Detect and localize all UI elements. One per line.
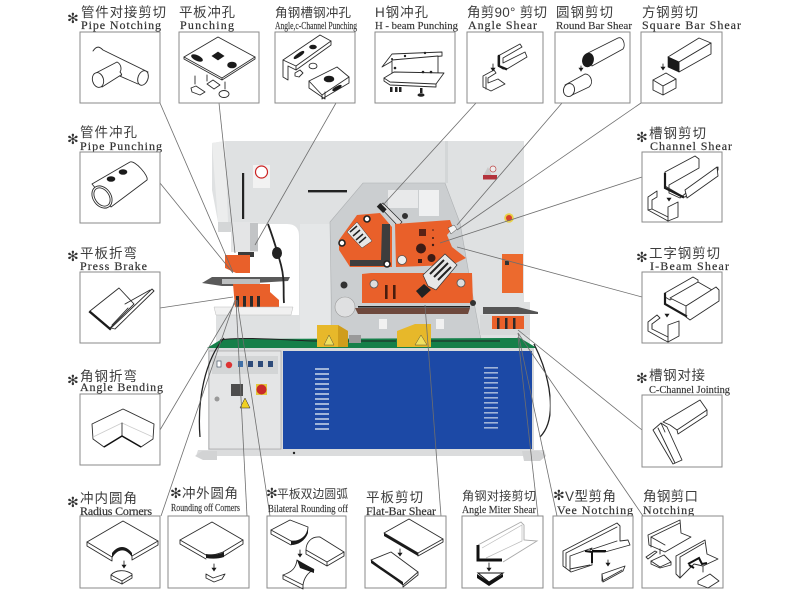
panel: press brake — [67, 245, 160, 343]
panel: pipe notching: Pipe Notching — [81, 18, 161, 32]
recessed tool area — [330, 183, 482, 345]
base rail — [196, 450, 546, 456]
panel: flat-bar shear: Flat-Bar Shear — [366, 504, 436, 518]
panel: radius corners — [67, 491, 160, 588]
panel: rounding off corners: 冲外圆角 — [182, 486, 238, 501]
emergency button — [504, 213, 514, 223]
knife table — [355, 308, 470, 314]
panel: I-beam shear: 工字钢剪切 — [649, 246, 720, 261]
top tool arm — [379, 203, 402, 226]
panel: channel shear: Channel Shear — [650, 139, 732, 153]
panel: I-beam shear: ✻ — [636, 250, 648, 266]
panel: bilateral rounding off: Bilateral Rounding off — [268, 503, 348, 515]
blue door — [283, 351, 532, 449]
panel: round bar shear: Round Bar Shear — [556, 20, 632, 32]
panel: angle and channel punching — [275, 6, 357, 103]
panel: angle miter shear — [462, 488, 543, 588]
panel: channel shear: 槽钢剪切 — [649, 126, 706, 141]
panel: flat-bar shear: 平板剪切 — [366, 490, 423, 505]
panel: press brake: 平板折弯 — [80, 245, 137, 261]
panel: bilateral rounding off: ✻ — [266, 486, 278, 502]
panel: H-beam punching: H钢冲孔 — [375, 5, 428, 20]
panel: vee notching — [553, 488, 633, 588]
panel: bilateral rounding off: 平板双边圆弧 — [277, 487, 348, 501]
panel: I-beam shear: I-Beam Shear — [650, 259, 729, 273]
guards — [317, 325, 348, 347]
panel: angle miter shear: Angle Miter Shear — [462, 504, 536, 516]
panel: notching: Notching — [643, 503, 694, 517]
panel: channel shear: ✻ — [636, 130, 648, 146]
panel: H-beam punching — [375, 5, 458, 103]
panel: vee notching: V型剪角 — [565, 489, 616, 504]
panel: pipe punching: ✻ — [67, 132, 79, 148]
panel: press brake: ✻ — [67, 249, 79, 265]
bar shear plate — [395, 220, 466, 267]
panel: notching — [642, 489, 723, 588]
panel: angle bending: 角钢折弯 — [80, 368, 137, 384]
green deck — [207, 338, 537, 348]
panel: radius corners: ✻ — [67, 495, 79, 511]
panel: angle and channel punching: 角钢槽钢冲孔 — [275, 6, 351, 20]
warning sticker — [253, 165, 270, 188]
panel: I-beam shear — [636, 246, 729, 343]
cable — [268, 224, 284, 303]
panel: vee notching: Vee Notching — [557, 503, 633, 517]
punch column — [218, 222, 258, 257]
control panel — [209, 351, 281, 449]
panel: rounding off corners: ✻ — [170, 486, 182, 502]
panel: radius corners: Radius Corners — [80, 504, 152, 518]
panel: pipe notching: 管件对接剪切 — [81, 4, 166, 20]
angle shear station — [339, 213, 392, 267]
panel: vee notching: ✻ — [553, 488, 565, 504]
panel: square bar shear: Square Bar Shear — [642, 18, 741, 32]
panel: pipe punching — [67, 125, 162, 223]
panel: angle miter shear: 角钢对接剪切 — [462, 488, 536, 503]
lower table — [214, 307, 293, 315]
ironworker machine — [195, 141, 550, 461]
panel: C-channel jointing: ✻ — [636, 371, 648, 387]
right side table — [483, 307, 538, 314]
panel: pipe punching: 管件冲孔 — [80, 125, 138, 140]
panel: notching: 角钢剪口 — [643, 489, 698, 504]
panel: C-channel jointing — [636, 367, 730, 467]
panel: flat-bar shear — [365, 490, 446, 588]
punch head — [225, 255, 250, 273]
lower shear plate — [362, 273, 473, 303]
side cables — [199, 338, 224, 437]
panel: angle bending — [67, 368, 163, 465]
panel: angle bending: ✻ — [67, 373, 79, 389]
panel: rounding off corners: Rounding off Corners — [171, 502, 240, 514]
panel: round bar shear: 圆钢剪切 — [556, 5, 613, 20]
panel: square bar shear — [641, 5, 741, 103]
panel: pipe notching — [67, 4, 166, 103]
panel: pipe punching: Pipe Punching — [80, 139, 162, 153]
panel: punching: Punching — [180, 18, 234, 32]
panel: pipe notching: ✻ — [67, 11, 79, 27]
work table — [202, 277, 290, 286]
cabinet frame — [208, 348, 534, 450]
panel: press brake: Press Brake — [80, 259, 147, 273]
diagonal shear — [423, 254, 457, 290]
orange cover — [502, 254, 523, 293]
lower die block — [233, 284, 279, 307]
panel: angle and channel punching: Angle,c-Channel Punching — [275, 20, 357, 32]
panel: radius corners: 冲内圆角 — [80, 491, 137, 506]
panel: angle shear — [467, 5, 547, 103]
vents — [315, 367, 498, 430]
panel: angle shear: 角剪90° 剪切 — [467, 5, 547, 20]
machine upper body — [212, 141, 530, 345]
panel: C-channel jointing: C-Channel Jointing — [649, 384, 730, 396]
panel: round bar shear — [555, 5, 632, 103]
panel: channel shear — [636, 126, 732, 222]
panel: H-beam punching: H - beam Punching — [375, 20, 458, 32]
panel: angle bending: Angle Bending — [80, 380, 163, 394]
right warning label — [483, 166, 497, 180]
panel: rounding off corners — [168, 486, 249, 588]
leader lines — [160, 103, 643, 516]
panel: bilateral rounding off — [266, 486, 348, 589]
panel: angle shear: Angle Shear — [468, 18, 537, 32]
panel: punching: 平板冲孔 — [179, 5, 236, 20]
panel: punching — [179, 5, 259, 103]
slots — [242, 173, 347, 219]
panel: square bar shear: 方钢剪切 — [642, 5, 698, 20]
panel: C-channel jointing: 槽钢对接 — [649, 367, 705, 383]
